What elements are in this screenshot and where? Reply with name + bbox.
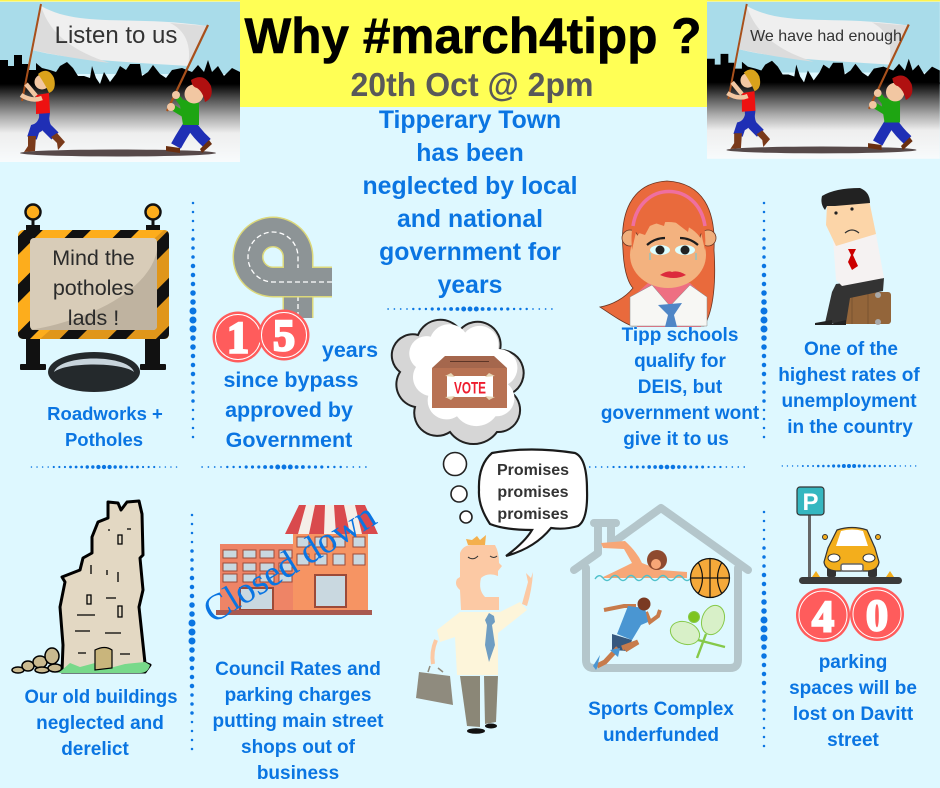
speech bubble: promises xyxy=(497,484,569,501)
caption: unemployment: highest rates of xyxy=(778,365,920,386)
icon: house with sports xyxy=(574,508,748,670)
caption: roadworks: Potholes xyxy=(65,429,143,450)
number badge: 40: 4 xyxy=(812,592,834,641)
icon: crying schoolgirl xyxy=(600,181,716,327)
number badge: 40: 0 xyxy=(866,591,888,640)
caption: buildings: neglected and xyxy=(36,713,164,734)
icon: closed shop xyxy=(196,495,383,632)
central statement: government for xyxy=(379,239,561,266)
icon: pothole xyxy=(48,352,140,392)
icon: man sitting on suitcase xyxy=(815,188,891,325)
icon: looping road xyxy=(248,232,332,318)
icon: roadworks barrier xyxy=(18,204,169,370)
central statement: has been xyxy=(416,140,524,167)
banner: We have had enough protesters: We have had enough xyxy=(750,28,902,45)
ballot label: VOTE xyxy=(454,378,486,398)
caption: schools xyxy=(601,325,760,450)
caption: shops: putting main street xyxy=(212,711,384,732)
runner xyxy=(593,598,660,670)
number badge: 15: 5 xyxy=(273,311,295,360)
caption: parking: street xyxy=(827,730,880,751)
caption: unemployment: unemployment xyxy=(781,391,917,412)
caption: bypass: approved by xyxy=(225,398,353,422)
caption: buildings: derelict xyxy=(61,739,129,760)
sign text: potholes xyxy=(53,276,134,300)
number badge: 15 xyxy=(212,310,310,362)
caption: schools: government wont xyxy=(601,403,760,424)
caption: sports xyxy=(588,699,734,746)
icon: ruined tower xyxy=(12,501,150,673)
panel: parking xyxy=(789,487,917,751)
caption: shops: business xyxy=(257,763,339,784)
tennis rackets xyxy=(667,602,728,658)
sign text xyxy=(52,246,135,330)
sign text: Mind the xyxy=(52,246,135,270)
caption: shops: shops out of xyxy=(241,737,356,758)
caption: sports: Sports Complex xyxy=(588,699,734,720)
caption: unemployment xyxy=(778,339,920,438)
caption: shops xyxy=(212,659,384,784)
caption: buildings: Our old buildings xyxy=(24,687,178,708)
panel: unemployment xyxy=(778,188,920,438)
caption: roadworks xyxy=(47,403,163,450)
speech bubble xyxy=(479,450,587,556)
caption: schools: Tipp schools xyxy=(622,325,738,346)
panel: schools DEIS xyxy=(600,181,760,450)
central statement: and national xyxy=(397,206,543,233)
date subtitle: 20th Oct @ 2pm xyxy=(350,66,594,103)
speech bubble: promises xyxy=(497,506,569,523)
figure: politician xyxy=(416,535,533,734)
sign text: lads ! xyxy=(68,306,119,330)
banner: Listen to us protesters: Listen to us xyxy=(55,22,177,49)
banner: Listen to us protesters xyxy=(0,2,240,162)
header band xyxy=(240,0,707,107)
caption: sports: underfunded xyxy=(603,725,719,746)
caption: parking: spaces will be xyxy=(789,678,917,699)
speech bubble: Promises xyxy=(497,462,569,479)
caption: schools: qualify for xyxy=(634,351,727,372)
panel: bypass 15 years xyxy=(212,232,378,452)
caption: parking: lost on Davitt xyxy=(793,704,914,725)
central statement xyxy=(363,107,577,299)
central statement: years xyxy=(438,272,502,299)
panel: derelict buildings xyxy=(12,501,178,760)
icon: parking sign and car xyxy=(797,487,902,584)
caption: buildings xyxy=(24,687,178,760)
sign letter: P xyxy=(802,489,819,516)
panel: shops closing xyxy=(196,495,384,784)
caption: shops: Council Rates and xyxy=(215,659,381,680)
stamp: closed down: Closed down xyxy=(196,495,383,632)
number badge: 40 xyxy=(796,587,904,642)
caption: schools: give it to us xyxy=(623,429,729,450)
caption: parking xyxy=(789,652,917,751)
caption: bypass: years xyxy=(322,338,378,362)
number badge: 15: 1 xyxy=(227,313,249,362)
caption: bypass xyxy=(223,338,378,452)
caption: unemployment: One of the xyxy=(804,339,898,360)
thought bubbles xyxy=(444,452,472,523)
panel: politician with promises xyxy=(392,320,587,734)
caption: bypass: since bypass xyxy=(223,368,359,392)
caption: bypass: Government xyxy=(226,428,352,452)
caption: parking: parking xyxy=(819,652,887,673)
caption: shops: parking charges xyxy=(225,685,371,706)
title: Why #march4tipp ? xyxy=(244,8,702,64)
basketball xyxy=(690,558,730,598)
caption: roadworks: Roadworks + xyxy=(47,403,163,424)
panel: sports complex xyxy=(574,508,748,746)
caption: unemployment: in the country xyxy=(787,417,913,438)
central statement: neglected by local xyxy=(363,173,577,200)
banner: We have had enough protesters xyxy=(707,2,940,159)
panel: roadworks and potholes xyxy=(18,204,169,450)
central statement: Tipperary Town xyxy=(379,107,561,134)
caption: schools: DEIS, but xyxy=(638,377,723,398)
icon: thought cloud with ballot box xyxy=(392,320,524,444)
swimmer xyxy=(595,541,691,580)
